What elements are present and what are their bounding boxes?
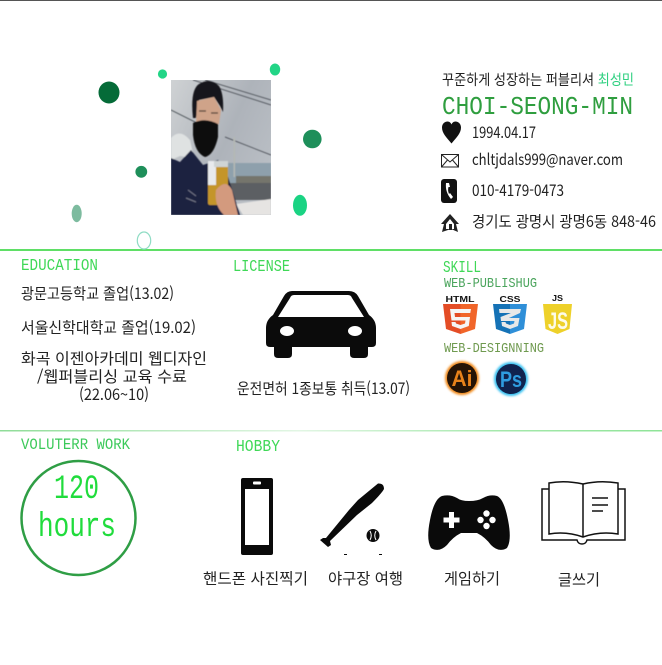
phone number: 010-4179-0473 [472,179,564,201]
heading: hobby: HOBBY [236,438,280,457]
tagline: 꾸준하게 성장하는 퍼블리셔 최성민 [442,69,634,90]
photo: portrait with drink by the sea [171,80,271,215]
icon: phone [441,179,457,203]
hobby label: ballpark trips: 야구장 여행 [328,567,403,589]
icon: illustrator: Ai [452,366,472,391]
icon: game controller [428,495,510,550]
icon: open book [542,482,625,544]
panel: license [233,258,410,399]
birth date: 1994.04.17 [472,121,536,143]
name: CHOI-SEONG-MIN [442,92,633,122]
panel: education [21,257,207,405]
hobby label: writing: 글쓰기 [558,568,600,590]
license caption: 운전면허 1종보통 취득(13.07) [237,377,410,399]
heading: license: LICENSE [233,258,290,277]
subheading: web publishing: WEB-PUBLISHUG [444,276,537,292]
icon: html5: HTML [446,295,475,304]
education item: high school: 광문고등학교 졸업(13.02) [21,282,174,304]
icon: smartphone [241,478,273,555]
panel: skill [443,259,572,396]
icon: house [441,214,459,232]
education item: academy course [21,347,207,405]
hobby label: phone photography: 핸드폰 사진찍기 [203,567,308,589]
heading: volunteer work: VOLUTERR WORK [21,436,130,454]
icon: heart [442,122,461,144]
education item: academy course: /웹퍼블리싱 교육 수료 [37,365,187,387]
panel: hobby [203,438,625,590]
icon: car [266,291,376,358]
icon: photoshop: Ps [500,367,522,392]
badge: 120 hours [22,461,136,575]
hobby label: gaming: 게임하기 [444,567,500,589]
education item: academy course: (22.06~10) [79,383,149,405]
panel: volunteer work [21,436,136,575]
icon: baseball bat and ball [320,483,384,555]
email: chltjdals999@naver.com [472,148,623,170]
badge: 120 hours: hours [38,509,116,547]
badge: 120 hours: 120 [54,471,99,509]
heading: skill: SKILL [443,259,481,278]
icon: js: JS [548,308,568,335]
education item: university: 서울신학대학교 졸업(19.02) [21,316,196,338]
icon: css3: CSS [500,295,521,304]
icon: envelope [442,154,458,167]
subheading: web designing: WEB-DESIGNNING [444,341,544,357]
decorative dots around the photo [72,64,322,249]
education item: academy course: 화곡 이젠아카데미 웹디자인 [21,347,207,369]
icon: js [543,294,572,335]
icon: js: JS [552,294,564,303]
heading: education: EDUCATION [21,257,98,276]
profile header [442,69,634,122]
